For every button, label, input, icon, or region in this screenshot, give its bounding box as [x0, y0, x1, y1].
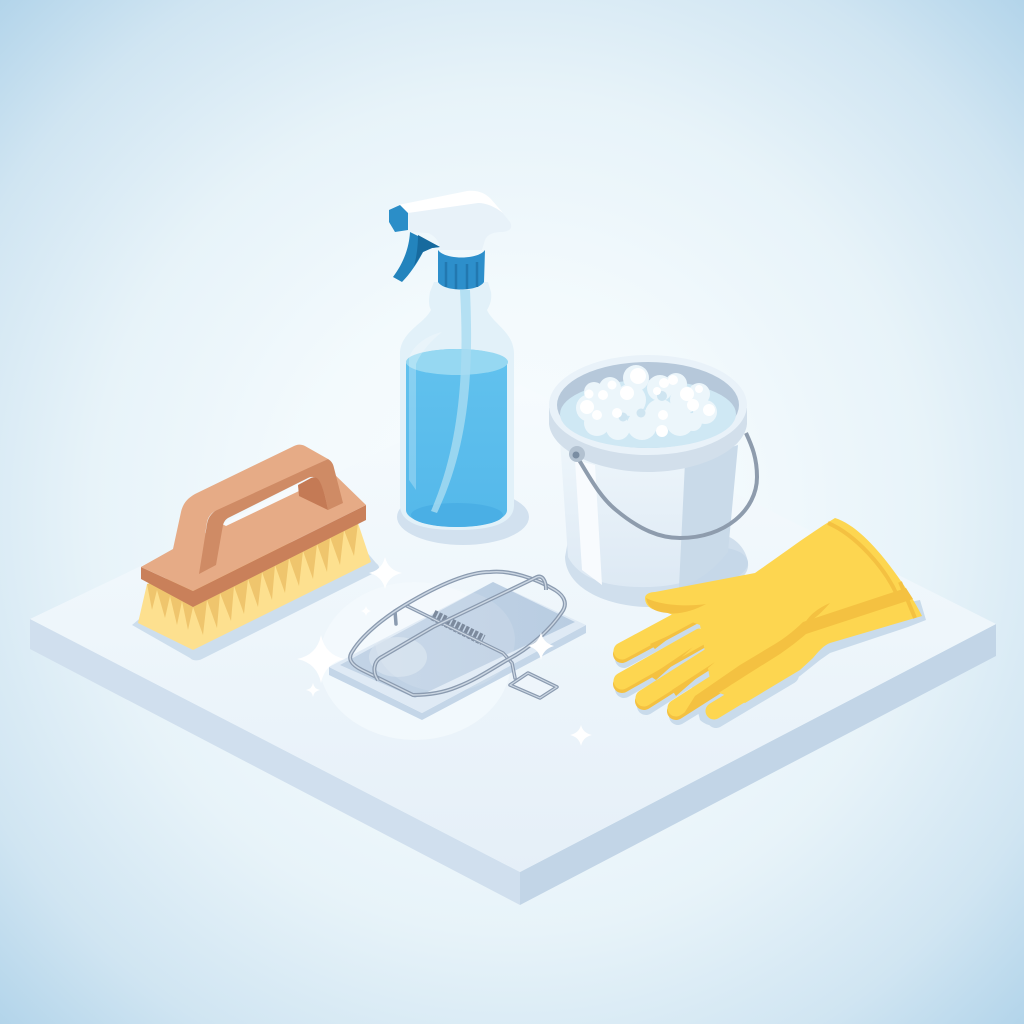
glove fingers — [622, 609, 790, 711]
sparkle top — [369, 557, 402, 589]
glow overlay — [375, 588, 515, 692]
finger creases — [650, 632, 715, 696]
thumb shade — [646, 598, 706, 613]
soft bubbles — [576, 365, 717, 440]
bucket shadow right — [679, 548, 748, 600]
liquid bottom ellipse — [411, 503, 503, 527]
bottle highlight — [409, 332, 442, 490]
fold band — [683, 588, 913, 715]
reflection — [369, 637, 427, 677]
spray head top face — [398, 191, 503, 213]
glove fingers lower edge — [622, 612, 745, 711]
wire frame — [350, 572, 565, 695]
bucket shadow — [565, 530, 748, 607]
body dark panel — [679, 445, 738, 587]
sparkle lower — [570, 725, 592, 746]
icon: mouse trap — [297, 557, 592, 746]
spring — [433, 615, 483, 640]
bottle body — [400, 282, 514, 530]
handle upper surface — [141, 445, 328, 574]
cap ridges — [446, 262, 477, 289]
liquid surface — [406, 349, 508, 375]
platform left side — [30, 619, 520, 905]
white slit under handle — [222, 485, 299, 526]
sparkle large — [297, 635, 345, 683]
bright bubbles — [580, 368, 715, 437]
platform right side — [520, 624, 996, 905]
handle front band — [199, 459, 343, 574]
platform top — [30, 385, 996, 872]
nozzle — [389, 205, 408, 232]
wire bar — [395, 605, 515, 678]
bristles — [138, 523, 371, 650]
handle inner right face — [298, 477, 328, 510]
rim side — [549, 408, 747, 472]
panel: isometric platform — [30, 385, 996, 905]
glow — [319, 582, 511, 740]
bottle shadow — [397, 489, 529, 545]
wrist crease — [804, 603, 830, 625]
cuff band — [828, 523, 915, 618]
rim top — [549, 355, 747, 455]
trap inner plate — [340, 582, 575, 698]
bristle shading — [147, 523, 358, 635]
spray head — [398, 191, 511, 250]
interior — [557, 362, 739, 448]
trap base top — [329, 582, 586, 713]
water — [560, 380, 736, 448]
icon: bucket with foam — [549, 355, 757, 607]
wood block top — [141, 470, 366, 591]
liquid — [406, 349, 507, 527]
handle pivot — [569, 446, 585, 462]
bucket body — [560, 440, 738, 587]
trigger loop — [510, 673, 557, 698]
body highlight — [575, 460, 602, 585]
sparkle tiny upper — [361, 606, 371, 616]
brush shadow — [132, 550, 379, 660]
bucket handle — [576, 433, 757, 538]
sparkle right — [528, 632, 554, 660]
trap base side — [329, 625, 586, 720]
cap — [438, 250, 485, 290]
gaps — [618, 391, 667, 422]
glove body — [645, 518, 922, 703]
icon: spray bottle — [389, 191, 529, 545]
glove shadow — [624, 600, 926, 726]
trigger dark face — [414, 235, 440, 266]
sparkle tiny — [306, 683, 320, 697]
foam — [576, 365, 717, 440]
wood block sides — [141, 505, 366, 607]
icon: rubber glove — [622, 518, 926, 726]
dip tube — [431, 290, 471, 513]
trigger — [393, 232, 440, 282]
icon: scrub brush — [132, 445, 379, 660]
